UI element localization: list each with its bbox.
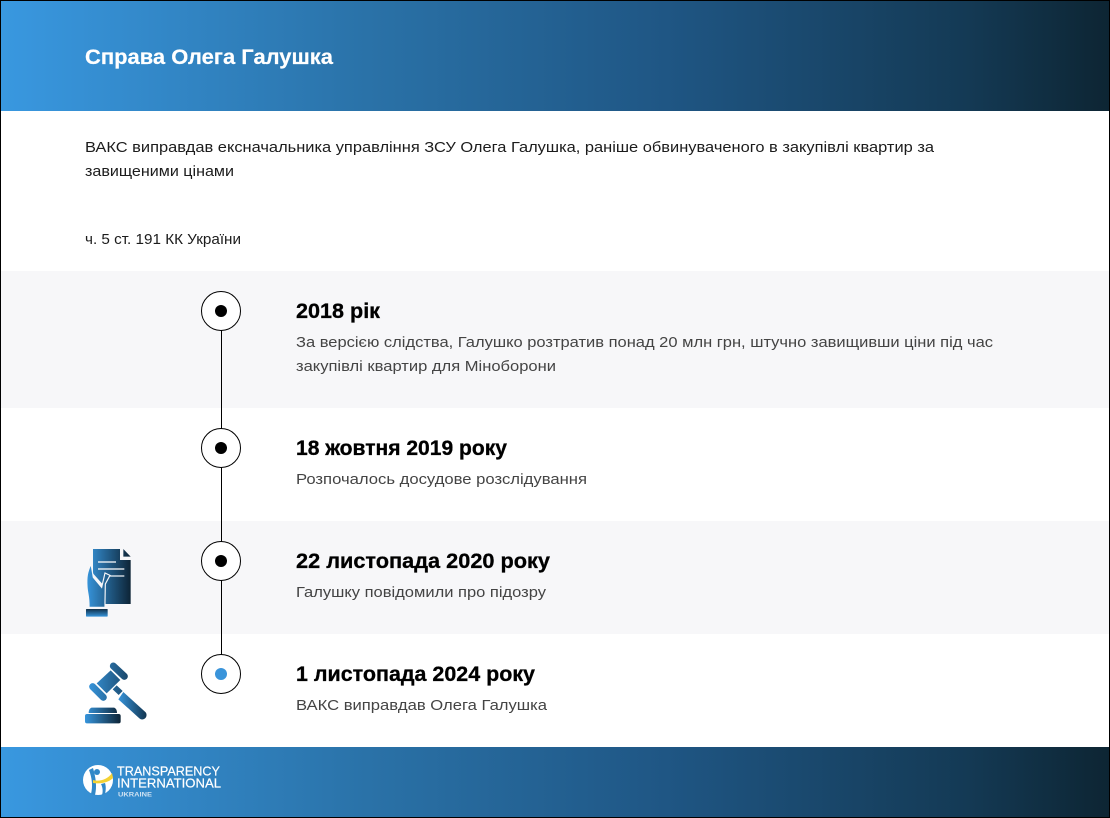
icon: logo globe <box>83 765 113 795</box>
timeline marker: 2018 <box>202 292 240 330</box>
logo: Transparency International Ukraine: TRANSPARENCY <box>117 764 220 778</box>
event: 1 November 2024 <box>296 663 548 714</box>
timeline marker: 2020 <box>202 542 240 580</box>
intro text: ВАКС виправдав ексначальника управління ЗСУ Олега Галушка, раніше обвинуваченого в закупівлі квартир за <box>85 139 935 156</box>
event: 1 November 2024: ВАКС виправдав Олега Галушка <box>296 697 548 714</box>
icon: gavel <box>85 666 147 723</box>
timeline marker: 2019 <box>202 428 240 468</box>
timeline line <box>220 311 222 674</box>
event: 2018: 2018 рік <box>296 300 380 323</box>
event: 2018: За версією слідства, Галушко розтратив понад 20 млн грн, штучно завищивши ціни під час <box>296 334 994 351</box>
event: 1 November 2024: 1 листопада 2024 року <box>296 663 535 686</box>
event: 2018 <box>296 300 994 375</box>
event: 18 October 2019: Розпочалось досудове розслідування <box>296 471 587 488</box>
event: 18 October 2019: 18 жовтня 2019 року <box>296 437 507 460</box>
footer bar <box>1 747 1109 817</box>
band: 2020 row <box>1 521 1109 634</box>
event: 22 November 2020: Галушку повідомили про підозру <box>296 584 547 601</box>
intro text: завищеними цінами <box>85 163 234 180</box>
event: 22 November 2020 <box>296 550 550 601</box>
intro text <box>85 139 935 180</box>
timeline marker: 2024 <box>202 654 240 694</box>
icon: hand holding document <box>86 549 131 617</box>
legal reference: ч. 5 ст. 191 КК України <box>85 231 241 248</box>
logo: Transparency International Ukraine: UKRAINE <box>118 792 153 798</box>
logo: Transparency International Ukraine: INTERNATIONAL <box>117 776 221 790</box>
header bar <box>1 1 1109 111</box>
band: 2018 row <box>1 271 1109 408</box>
logo: Transparency International Ukraine <box>83 764 221 798</box>
event: 18 October 2019 <box>296 437 587 488</box>
event: 2018: закупівлі квартир для Міноборони <box>296 358 556 375</box>
event: 22 November 2020: 22 листопада 2020 року <box>296 550 550 573</box>
title: Справа Олега Галушка <box>85 46 333 69</box>
